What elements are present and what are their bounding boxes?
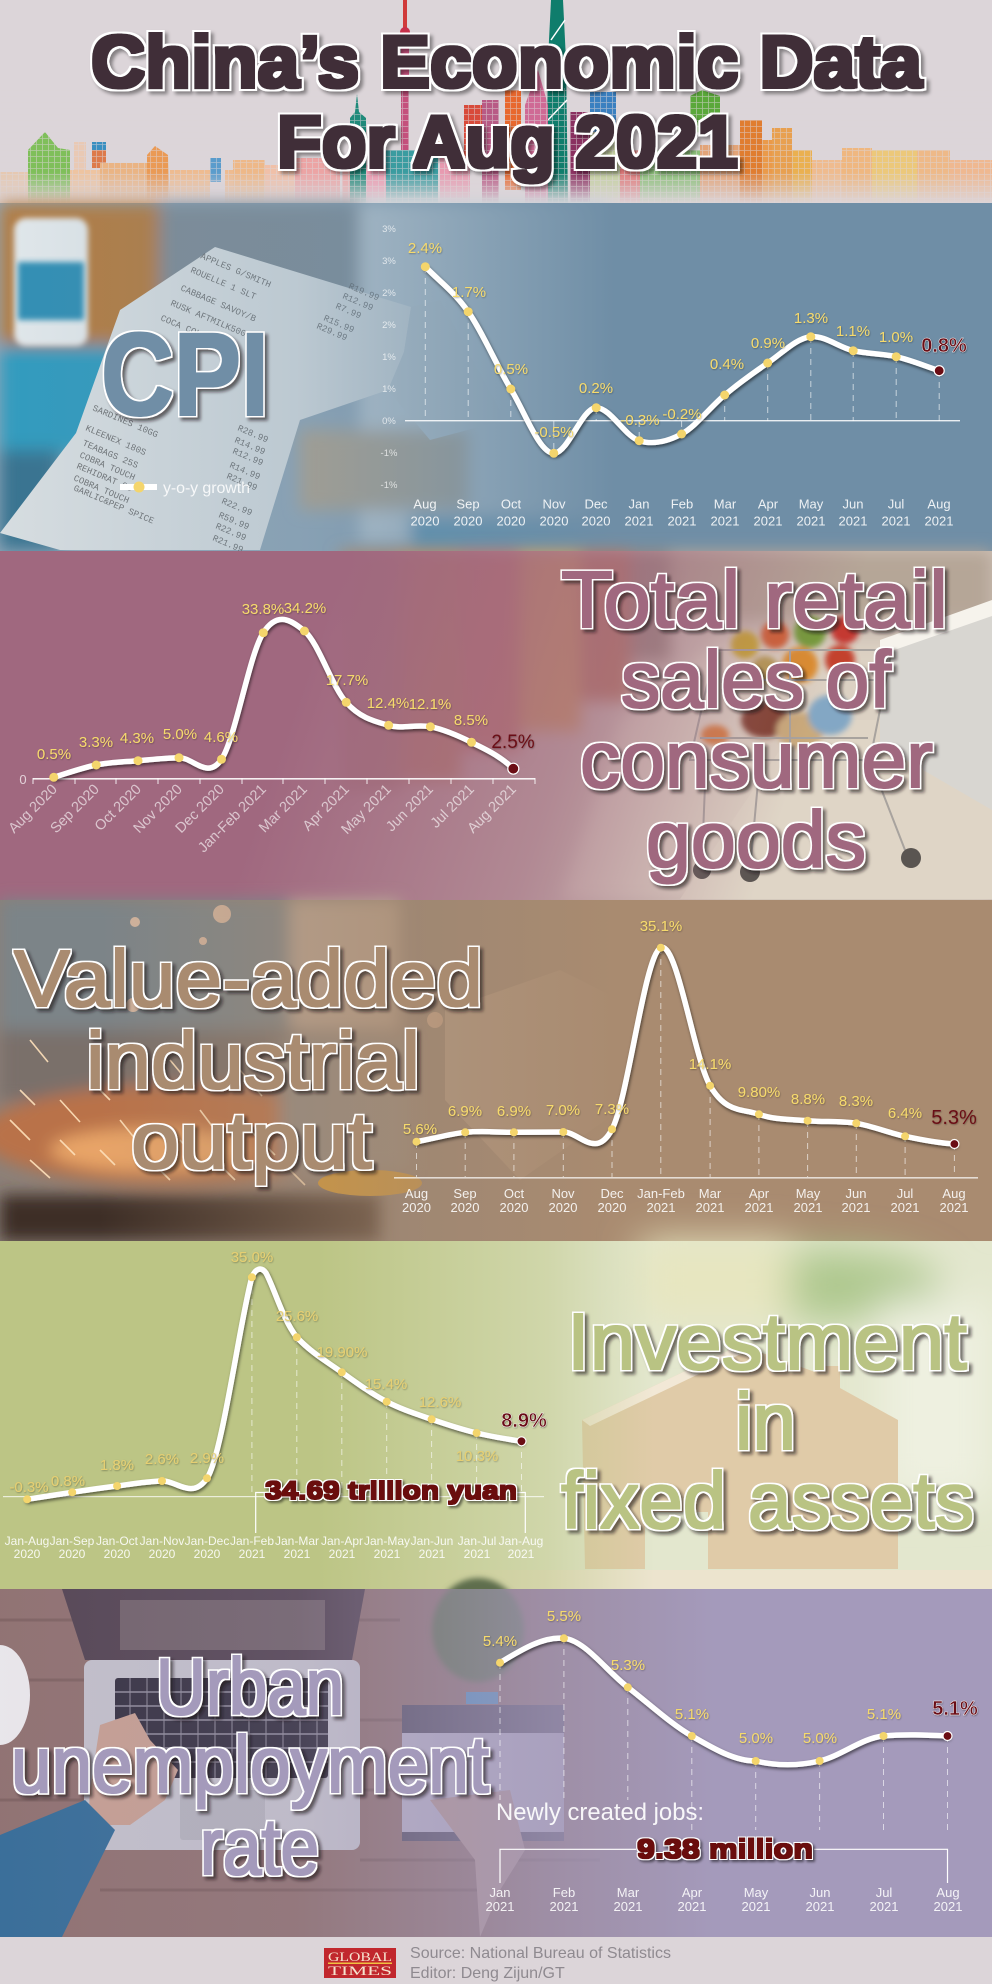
x axis labels: Aug 2021 — [465, 782, 520, 837]
newly created jobs label: Newly created jobs: — [496, 1799, 704, 1826]
value labels: 5.5% — [547, 1608, 581, 1625]
x axis labels: Aug — [936, 1885, 960, 1900]
industrial heading — [14, 934, 483, 1185]
value labels: 12.6% — [419, 1394, 461, 1411]
retail background photo — [0, 551, 992, 900]
x axis labels: 2020 — [454, 514, 482, 528]
value labels: 2.9% — [190, 1450, 224, 1467]
data points — [496, 1634, 888, 1765]
jobs bracket — [500, 1849, 948, 1883]
x axis labels: Apr 2021 — [300, 782, 353, 834]
panel: CPI — [0, 203, 992, 555]
data points — [412, 944, 909, 1146]
retail line chart: 0 — [19, 772, 27, 787]
value labels: 0.2% — [579, 380, 613, 397]
x axis labels: 2021 — [550, 1899, 578, 1914]
receipt text: COCA COLA 6PACK — [159, 314, 238, 355]
urban heading: Urban — [156, 1642, 344, 1731]
logo: Global Times: GLOBAL — [328, 1949, 392, 1964]
urban heading: unemployment — [11, 1720, 489, 1809]
x axis labels: Apr — [749, 1186, 770, 1201]
x axis labels: 2021 — [870, 1899, 898, 1914]
data points — [421, 262, 901, 458]
receipt text: R21.99 — [225, 472, 259, 493]
x axis labels: 2021 — [925, 514, 953, 528]
x axis labels: 2020 — [598, 1200, 626, 1215]
value labels: 2.6% — [145, 1451, 179, 1468]
x axis labels: Nov — [542, 496, 566, 512]
value labels: 35.0% — [231, 1249, 273, 1266]
x axis labels: Nov — [551, 1186, 575, 1201]
value labels: 0.9% — [751, 335, 785, 352]
x axis labels: Jun 2021 — [383, 782, 437, 835]
receipt text: R59.99 — [217, 511, 251, 532]
x axis labels: 2021 — [239, 1547, 266, 1561]
x axis labels: 2021 — [797, 514, 825, 528]
x axis labels: Jan-Feb 2021 — [195, 782, 270, 856]
CPI line chart — [381, 224, 967, 528]
receipt text: TEABAGS 25S — [81, 439, 139, 471]
CPI background photo — [0, 203, 992, 555]
x axis labels: Apr — [682, 1885, 703, 1900]
industrial heading: output — [131, 1096, 372, 1185]
callout: jobs total: 9.38 million — [637, 1834, 813, 1864]
x axis labels: 2021 — [614, 1899, 642, 1914]
x axis labels: Feb — [553, 1885, 575, 1900]
x axis labels: Aug — [413, 496, 437, 512]
value labels: 6.9% — [497, 1103, 531, 1120]
x axis labels: 2021 — [696, 1200, 724, 1215]
x axis labels: 2021 — [647, 1200, 675, 1215]
receipt text: GARLIC&PEP SPICE — [72, 484, 155, 527]
retail heading: goods — [646, 795, 866, 884]
x axis labels: 2020 — [402, 1200, 431, 1215]
x axis labels: 2021 — [668, 514, 696, 528]
laptop base — [84, 1660, 360, 1850]
value labels: 1.8% — [100, 1457, 134, 1474]
value labels: 34.2% — [284, 600, 326, 617]
receipt text: R12.99 — [341, 292, 375, 313]
source and editor credit — [410, 1945, 671, 1982]
x axis labels: 2020 — [497, 514, 525, 528]
value labels: 25.6% — [276, 1308, 318, 1325]
logo: Global Times — [324, 1948, 396, 1978]
x axis labels: 2020 — [451, 1200, 479, 1215]
value labels: 5.0% — [803, 1730, 837, 1747]
urban heading — [11, 1642, 489, 1891]
receipt text: COBRA TOUCH — [78, 451, 136, 483]
x axis labels: Mar 2021 — [256, 782, 311, 836]
retail heading: consumer — [580, 715, 933, 804]
title: For Aug 2021 — [277, 102, 738, 183]
x axis labels: Aug — [927, 496, 951, 512]
receipt text: ROUELLE 1 SLT — [189, 266, 258, 302]
receipt text: R19.99 — [347, 282, 381, 303]
industrial heading: Value-added — [14, 934, 483, 1023]
x axis labels: Jan-Sep — [50, 1534, 95, 1548]
value labels: 1.7% — [452, 284, 486, 301]
x axis labels: 2020 — [104, 1547, 131, 1561]
laptop screen — [62, 1589, 365, 1660]
value labels: 7.3% — [595, 1101, 629, 1118]
receipt text: R29.99 — [315, 322, 349, 343]
value labels: 0.4% — [710, 356, 744, 373]
x axis labels: 2021 — [742, 1899, 770, 1914]
retail line chart — [6, 600, 535, 856]
value labels — [408, 240, 967, 441]
value labels: 8.9% — [501, 1410, 547, 1432]
value labels: 15.4% — [365, 1376, 407, 1393]
x axis labels: 2020 — [194, 1547, 221, 1561]
investment background photo — [0, 1241, 992, 1589]
x axis labels: 2021 — [839, 514, 867, 528]
title — [91, 22, 923, 183]
panel: industrial output — [0, 900, 992, 1241]
footer — [0, 1937, 992, 1984]
x axis labels: Jan-Nov — [140, 1534, 184, 1548]
x axis labels: Jul — [888, 496, 904, 512]
value labels: 1.3% — [794, 310, 828, 327]
logo: Global Times: TIMES — [328, 1963, 392, 1978]
y axis labels: 1% — [382, 384, 396, 395]
value labels: 4.6% — [204, 729, 238, 746]
x axis labels — [5, 1534, 543, 1561]
value labels: 5.0% — [739, 1730, 773, 1747]
legend: y-o-y growth — [163, 480, 250, 497]
left hand — [88, 1713, 178, 1825]
x axis labels: 2020 — [149, 1547, 176, 1561]
x axis labels: Jan — [629, 496, 649, 512]
callout: investment total: 34.69 trillion yuan — [265, 1477, 517, 1505]
x axis labels: Aug — [942, 1186, 966, 1201]
title: China’s Economic Data — [91, 22, 923, 103]
x axis labels: 2021 — [891, 1200, 919, 1215]
trend line — [416, 947, 954, 1144]
x axis labels: Aug — [405, 1186, 428, 1201]
investment heading: Investment — [567, 1297, 967, 1386]
industrial heading: industrial — [86, 1016, 420, 1105]
x axis labels: 2021 — [486, 1899, 514, 1914]
value labels: 14.1% — [689, 1056, 731, 1073]
x axis labels: Jan-Jul — [458, 1534, 496, 1548]
x axis labels — [6, 782, 520, 856]
value labels: 6.9% — [448, 1103, 482, 1120]
trend line — [500, 1638, 948, 1765]
x axis labels: Jun — [810, 1885, 830, 1900]
value labels: 0.5% — [37, 746, 71, 763]
value labels: 1.1% — [836, 323, 870, 340]
x axis labels: Jan-Apr — [321, 1534, 363, 1548]
value labels: 1.0% — [879, 329, 913, 346]
header panel — [0, 0, 992, 204]
x axis labels: Jan-Feb — [230, 1534, 274, 1548]
plate — [0, 1645, 30, 1745]
industrial background photo — [0, 900, 992, 1241]
legend — [120, 480, 250, 497]
receipt text: COBRA TOUCH — [72, 474, 130, 506]
value labels: 8.8% — [791, 1091, 825, 1108]
trend line — [54, 619, 513, 777]
value labels: 19.90% — [317, 1344, 367, 1361]
value labels: 4.3% — [120, 730, 154, 747]
tablet — [402, 1705, 564, 1841]
receipt text: R12.99 — [231, 447, 265, 468]
x axis labels: Jul 2021 — [428, 782, 478, 832]
x axis labels: 2020 — [500, 1200, 528, 1215]
x axis labels: 2021 — [842, 1200, 870, 1215]
x axis labels: May — [796, 1186, 821, 1201]
retail heading — [561, 555, 948, 884]
x axis labels: 2021 — [754, 514, 782, 528]
data points — [49, 626, 476, 782]
x axis labels: Feb — [671, 496, 693, 512]
receipt text: R28.99 — [236, 424, 270, 445]
receipt text: R22.99 — [220, 497, 254, 518]
source and editor credit: Editor: Deng Zijun/GT — [410, 1965, 565, 1982]
x axis labels: Jan-Aug — [5, 1534, 49, 1548]
shopping cart — [690, 616, 921, 882]
x axis labels: Jan-Aug — [499, 1534, 543, 1548]
x axis labels: 2020 — [540, 514, 568, 528]
x axis labels: Jun — [843, 496, 863, 512]
urban background photo — [0, 1578, 992, 1937]
x axis labels: May — [744, 1885, 769, 1900]
investment heading: fixed assets — [561, 1456, 974, 1545]
x axis labels: Jan-Mar — [275, 1534, 319, 1548]
investment heading — [561, 1297, 974, 1545]
sleeve — [0, 1800, 115, 1937]
value labels: 0.5% — [494, 361, 528, 378]
receipt text: KLEENEX 180S — [84, 424, 147, 458]
value labels: 35.1% — [640, 918, 682, 935]
x axis labels: 2021 — [934, 1899, 962, 1914]
receipt text: R14.99 — [233, 436, 267, 457]
value labels: 0.8% — [51, 1473, 85, 1490]
receipt text: R7.99 — [334, 302, 363, 321]
x axis labels: 2021 — [711, 514, 739, 528]
urban line chart — [483, 1608, 978, 1914]
value labels: 6.4% — [888, 1105, 922, 1122]
y axis labels: -1% — [381, 480, 398, 491]
value labels: 5.0% — [163, 726, 197, 743]
x axis labels: 2020 — [14, 1547, 41, 1561]
y axis labels — [381, 224, 398, 491]
x axis labels: Dec — [600, 1186, 624, 1201]
source and editor credit: Source: National Bureau of Statistics — [410, 1945, 671, 1962]
x axis labels: 2020 — [411, 514, 439, 528]
x axis labels: Sep 2020 — [48, 782, 103, 837]
receipt text: R21.99 — [211, 534, 245, 555]
value labels: 2.5% — [491, 732, 535, 753]
x axis labels — [411, 496, 953, 528]
x axis labels: Oct — [501, 496, 521, 512]
x axis labels: 2021 — [625, 514, 653, 528]
x axis labels: Jan — [490, 1885, 510, 1900]
x axis labels — [402, 1186, 968, 1215]
total bracket — [256, 1492, 525, 1533]
receipt text: RUSK AFTMILK500G — [169, 299, 252, 342]
x axis labels: 2020 — [59, 1547, 86, 1561]
retail heading: Total retail — [561, 555, 948, 644]
value labels: 5.4% — [483, 1633, 517, 1650]
urban heading: rate — [200, 1802, 319, 1891]
x axis labels: Dec 2020 — [173, 782, 228, 837]
receipt text: R15.99 — [322, 314, 356, 335]
value labels: 2.4% — [408, 240, 442, 257]
x axis labels: Mar — [617, 1885, 640, 1900]
x axis labels: 2021 — [329, 1547, 356, 1561]
x axis labels: Apr — [758, 496, 779, 512]
x axis labels: 2021 — [419, 1547, 446, 1561]
panel: urban unemployment — [0, 1578, 992, 1937]
y axis labels: 2% — [382, 320, 396, 331]
value labels: 5.1% — [932, 1698, 978, 1720]
retail heading: sales of — [621, 635, 892, 724]
receipt text: R14.99 — [228, 461, 262, 482]
value labels: 7.0% — [546, 1102, 580, 1119]
value labels: 5.1% — [867, 1706, 901, 1723]
panel: fixed-asset investment — [0, 1241, 992, 1589]
skyline illustration — [0, 0, 992, 204]
value labels: 10.3% — [456, 1448, 498, 1465]
value labels: 12.4% — [367, 695, 409, 712]
value labels: -0.2% — [662, 406, 702, 423]
x axis labels: 2021 — [508, 1547, 535, 1561]
receipt text — [72, 252, 381, 555]
value labels: 5.6% — [403, 1121, 437, 1138]
x axis labels: 2020 — [582, 514, 610, 528]
x axis labels: Jan-May — [364, 1534, 410, 1548]
x axis labels: Jan-Oct — [96, 1534, 139, 1548]
value labels: -0.5% — [534, 424, 574, 441]
x axis labels: Jun — [846, 1186, 866, 1201]
value labels: 5.1% — [675, 1706, 709, 1723]
value labels: 0.8% — [921, 335, 967, 357]
x axis labels: 2021 — [940, 1200, 968, 1215]
y axis labels: 3% — [382, 256, 396, 267]
x axis labels: 2021 — [284, 1547, 311, 1561]
receipt text: SARDINES 10GG — [91, 404, 159, 440]
x axis labels: Jul — [876, 1885, 892, 1900]
x axis labels: 2021 — [745, 1200, 773, 1215]
y axis labels: -1% — [381, 448, 398, 459]
value labels: 17.7% — [326, 672, 368, 689]
x axis labels: Nov 2020 — [131, 782, 186, 837]
value labels: 8.5% — [454, 712, 488, 729]
panel: retail sales — [0, 551, 992, 900]
x axis labels: Sep — [453, 1186, 477, 1201]
x axis labels: 2021 — [464, 1547, 491, 1561]
x axis labels: 2021 — [794, 1200, 822, 1215]
investment line chart — [3, 1249, 547, 1561]
x axis labels: May — [799, 496, 824, 512]
industrial line chart — [394, 918, 978, 1215]
value labels: 33.8% — [242, 601, 284, 618]
x axis labels: 2021 — [882, 514, 910, 528]
x axis labels: 2021 — [806, 1899, 834, 1914]
x axis labels — [486, 1885, 962, 1914]
value labels: 9.80% — [738, 1084, 780, 1101]
receipt text: CABBAGE SAVOY/B — [179, 284, 258, 325]
y axis labels: 2% — [382, 288, 396, 299]
y axis labels: 3% — [382, 224, 396, 235]
data points — [23, 1273, 481, 1503]
x axis labels: 2021 — [678, 1899, 706, 1914]
value labels: 5.3% — [611, 1657, 645, 1674]
x axis labels: Jul — [897, 1186, 913, 1201]
plant — [432, 1578, 524, 1682]
x axis labels: 2020 — [549, 1200, 577, 1215]
x axis labels: Jan-Jun — [411, 1534, 453, 1548]
investment heading: in — [735, 1377, 796, 1466]
receipt text: REHIDRAT 6S — [75, 462, 133, 494]
value labels: 12.1% — [409, 696, 451, 713]
trend line — [27, 1269, 521, 1499]
x axis labels: Aug 2020 — [6, 782, 61, 837]
y axis labels: 0% — [382, 416, 396, 427]
value labels — [9, 1249, 547, 1496]
value labels: -0.3% — [620, 412, 660, 429]
receipt text: R22.99 — [214, 522, 248, 543]
value labels: 8.3% — [839, 1093, 873, 1110]
value labels: 3.3% — [79, 734, 113, 751]
value labels: 5.3% — [931, 1107, 977, 1129]
wooden house — [582, 1345, 898, 1569]
y axis labels: 1% — [382, 352, 396, 363]
value labels — [483, 1608, 978, 1747]
x axis labels: Oct 2020 — [92, 782, 145, 834]
value labels — [37, 600, 535, 763]
x axis labels: May 2021 — [338, 782, 395, 838]
value labels: -0.3% — [9, 1479, 49, 1496]
value labels — [403, 918, 977, 1138]
CPI heading: CPI — [101, 309, 269, 441]
x axis labels: Jan-Dec — [185, 1534, 229, 1548]
x axis labels: Jan-Feb — [637, 1186, 685, 1201]
x axis labels: Mar — [714, 496, 737, 512]
x axis labels: Oct — [504, 1186, 524, 1201]
receipt text: APPLES G/SMITH — [199, 252, 272, 290]
trend line — [425, 267, 939, 453]
x axis labels: Mar — [699, 1186, 722, 1201]
right hand — [430, 1790, 525, 1937]
x axis labels: Sep — [456, 496, 480, 512]
x axis labels: 2021 — [374, 1547, 401, 1561]
x axis labels: Dec — [584, 496, 608, 512]
